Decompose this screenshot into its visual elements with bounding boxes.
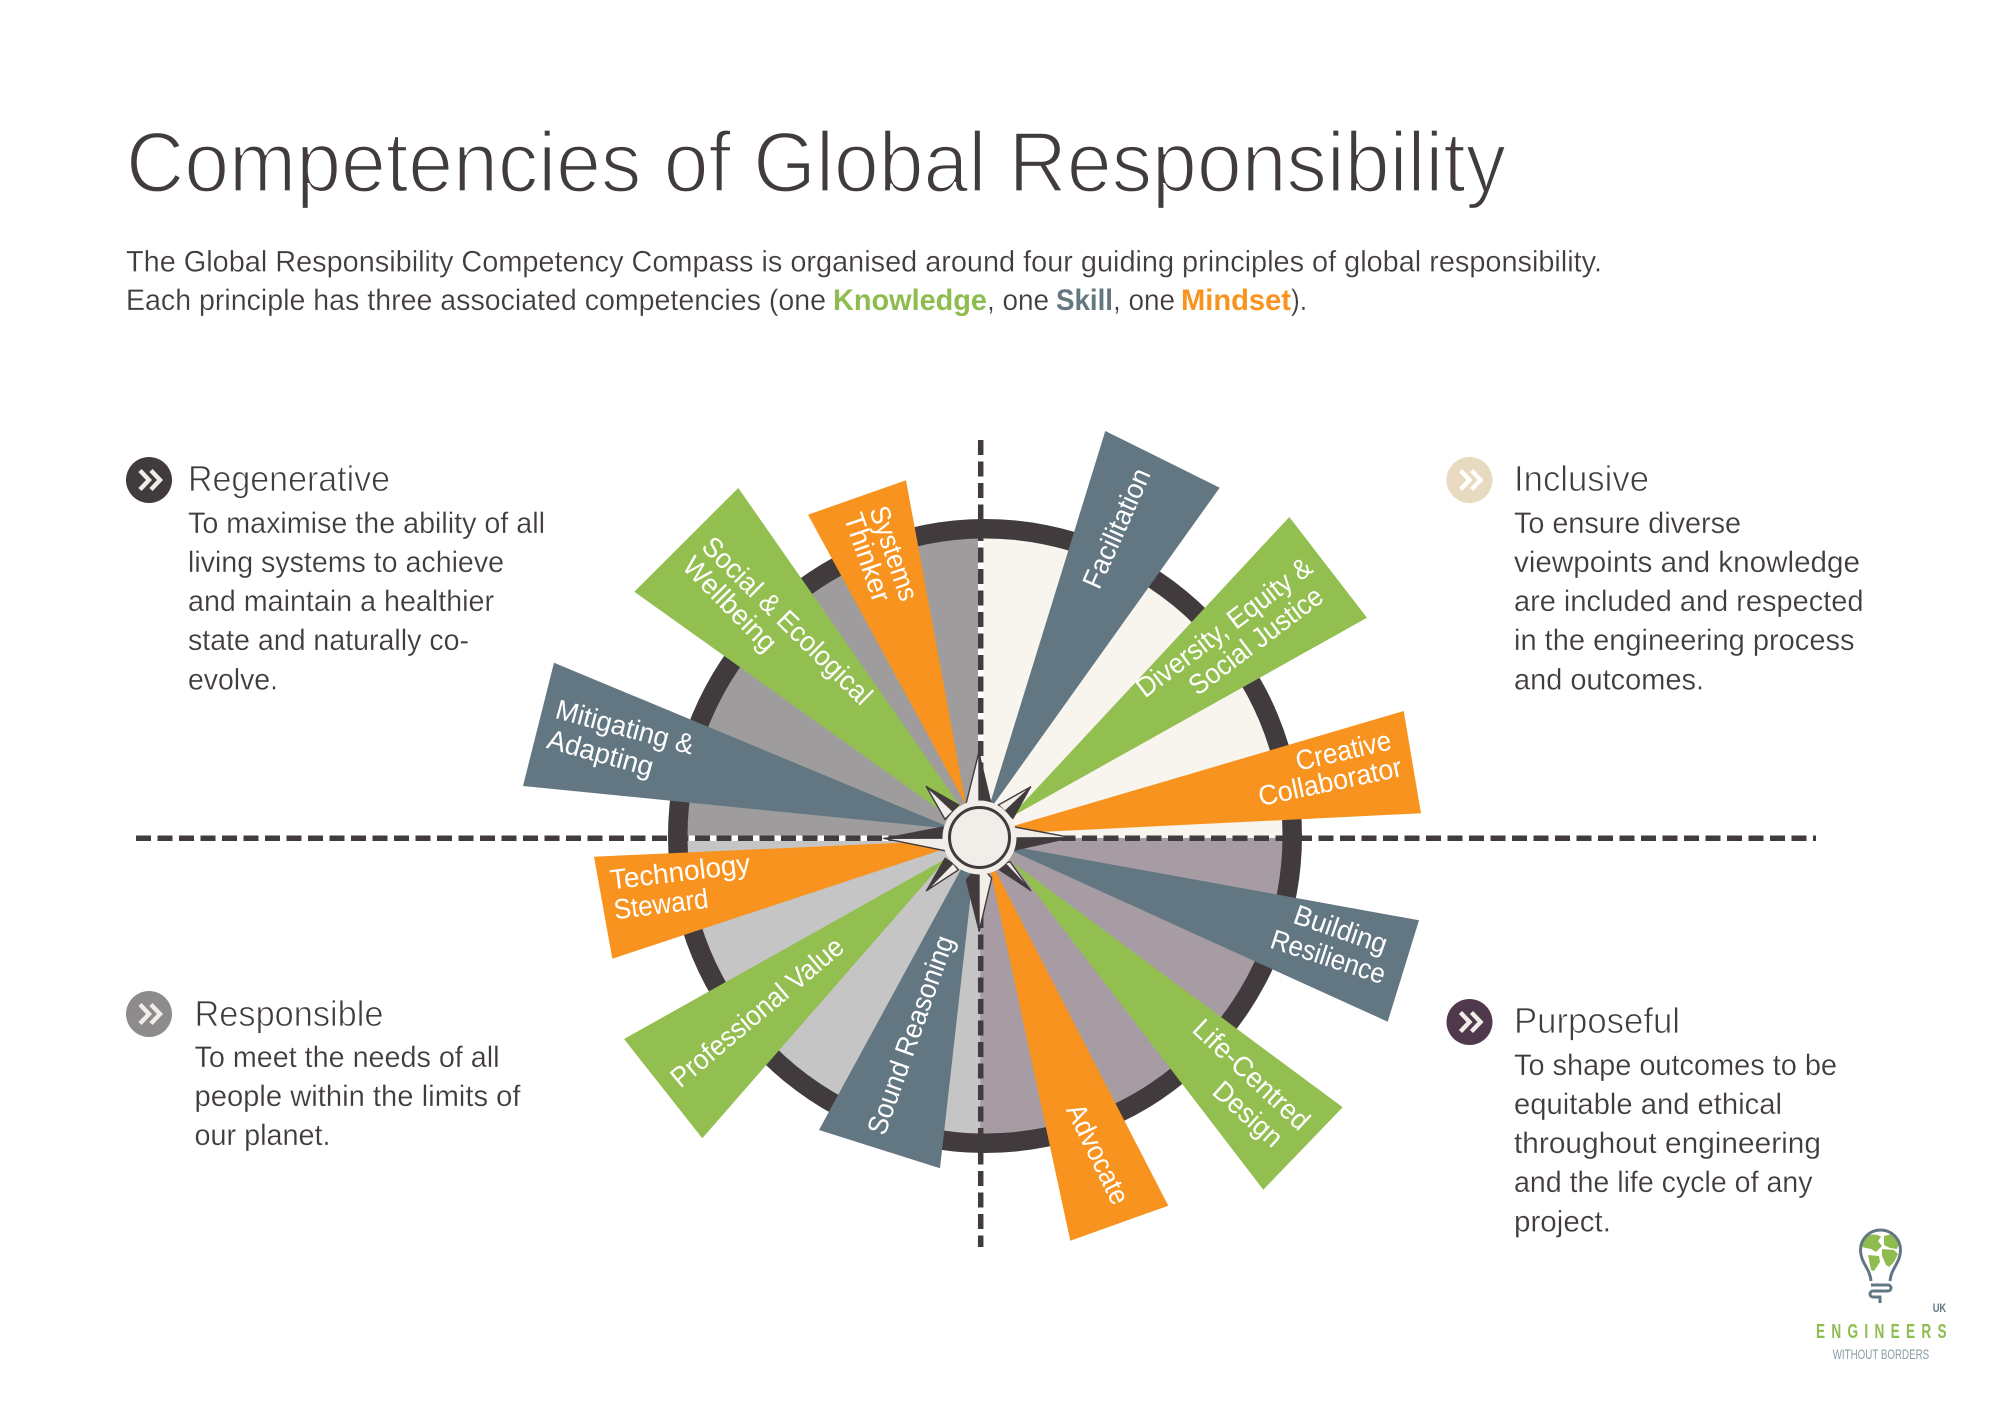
blade: Systems Thinker: [808, 480, 966, 805]
panel: Inclusive principle: [1446, 457, 1864, 696]
blade: Diversity, Equity & Social Justice: Social Justice: [1182, 580, 1329, 701]
heading: Regenerative: Regenerative: [188, 458, 390, 499]
blade: Professional Value: Professional Value: [664, 931, 850, 1093]
icon: Regenerative chevrons: [126, 457, 172, 503]
icon: Purposeful chevrons: [1446, 999, 1492, 1045]
text: Regenerative description: evolve.: [188, 664, 278, 696]
blade: Advocate: Advocate: [1060, 1099, 1136, 1209]
blade: Creative Collaborator: Creative: [1293, 725, 1394, 777]
blade: Mitigating & Adapting: Adapting: [544, 723, 657, 783]
intro text: Each principle has three associated competencies (one: [126, 284, 826, 317]
text: Purposeful description: project.: [1514, 1206, 1611, 1238]
blade: Mitigating & Adapting: Mitigating &: [552, 694, 698, 760]
blade: Building Resilience: [1010, 846, 1419, 1022]
panel: Regenerative principle: [126, 457, 545, 696]
compass axis lines: [136, 440, 1816, 1247]
logo text: UK: UK: [1933, 1301, 1946, 1315]
text: Purposeful description: [1514, 1049, 1837, 1238]
quadrant: Responsible: [688, 841, 981, 1134]
text: Regenerative description: To maximise the ability of all: [188, 507, 545, 540]
logo text: Engineers: ENGINEERS: [1816, 1320, 1947, 1343]
blade: Technology Steward: Technology: [608, 848, 752, 895]
blade: Creative Collaborator: Collaborator: [1255, 751, 1405, 812]
panel: Purposeful principle: [1446, 999, 1837, 1238]
text: Inclusive description: [1514, 507, 1864, 696]
intro text: , one: [1113, 284, 1175, 317]
text: Inclusive description: viewpoints and knowledge: [1514, 546, 1860, 579]
blade: Advocate: [990, 868, 1168, 1241]
blade: Social & Ecological Wellbeing: [634, 488, 962, 826]
text: Inclusive description: and outcomes.: [1514, 664, 1704, 696]
intro text: [126, 246, 1602, 317]
blade: Mitigating & Adapting: [523, 663, 954, 829]
text: Regenerative description: state and naturally co-: [188, 624, 469, 657]
blade: Technology Steward: Steward: [612, 883, 710, 925]
text: Regenerative description: living systems to achieve: [188, 546, 504, 579]
intro text: ).: [1291, 284, 1307, 317]
heading: Responsible: Responsible: [194, 993, 384, 1034]
heading: Purposeful: Purposeful: [1514, 1000, 1680, 1041]
panel: Responsible principle: [126, 991, 521, 1152]
icon: Inclusive chevrons: [1446, 457, 1492, 503]
text: Purposeful description: equitable and ethical: [1514, 1088, 1782, 1121]
text: Purposeful description: throughout engineering: [1514, 1127, 1821, 1160]
quadrant: Purposeful: [980, 838, 1282, 1134]
icon: compass star: [883, 752, 1072, 932]
intro text: Knowledge: [833, 284, 987, 317]
icon: light bulb with globe: [1860, 1230, 1900, 1303]
blade: Life-Centred Design: Design: [1207, 1075, 1289, 1153]
intro text: , one: [987, 284, 1049, 317]
text: Inclusive description: are included and respected: [1514, 585, 1864, 618]
text: Responsible description: our planet.: [194, 1119, 330, 1152]
text: Inclusive description: in the engineering process: [1514, 624, 1854, 657]
compass ring: [668, 519, 1302, 1153]
logo text: Without Borders: WITHOUT BORDERS: [1833, 1347, 1929, 1362]
blade: Facilitation: Facilitation: [1076, 464, 1157, 593]
blade: Systems Thinker: Systems: [863, 502, 925, 605]
blade: Sound Reasoning: Sound Reasoning: [861, 931, 960, 1139]
intro text: The Global Responsibility Competency Compass is organised around four guiding principles of global responsibility.: [126, 246, 1602, 278]
blade: Technology Steward: [594, 840, 973, 959]
blade: Diversity, Equity & Social Justice: [1009, 517, 1367, 818]
blade: Sound Reasoning: [819, 840, 977, 1168]
blade: Building Resilience: Resilience: [1267, 924, 1390, 990]
text: Regenerative description: and maintain a healthier: [188, 585, 494, 618]
logo: Engineers Without Borders UK: [1816, 1230, 1947, 1362]
blade: Diversity, Equity & Social Justice: Diversity, Equity &: [1130, 551, 1318, 703]
compass chart: [136, 431, 1816, 1247]
quadrant: Regenerative: [688, 538, 981, 836]
text: Regenerative description: [188, 507, 545, 696]
blade: Systems Thinker: Thinker: [838, 509, 897, 606]
blade: Life-Centred Design: [1012, 862, 1343, 1190]
quadrant: Inclusive: [980, 538, 1282, 838]
text: Inclusive description: To ensure diverse: [1514, 507, 1741, 540]
blade: Creative Collaborator: [984, 711, 1421, 835]
title: Competencies of Global Responsibility: [126, 116, 1506, 210]
text: Responsible description: To meet the needs of all: [194, 1041, 500, 1074]
text: Purposeful description: and the life cycle of any: [1514, 1166, 1812, 1199]
blade: Facilitation: [985, 431, 1220, 820]
blade: Life-Centred Design: Life-Centred: [1187, 1013, 1316, 1136]
intro text: Mindset: [1181, 284, 1291, 317]
heading: Inclusive: Inclusive: [1514, 458, 1649, 499]
text: Responsible description: people within the limits of: [194, 1080, 521, 1113]
blade: Social & Ecological Wellbeing: Social & Ecological: [696, 530, 879, 711]
text: Purposeful description: To shape outcomes to be: [1514, 1049, 1837, 1082]
blade: Professional Value: [624, 858, 947, 1138]
intro text: Skill: [1056, 284, 1113, 317]
icon: Responsible chevrons: [126, 991, 172, 1037]
text: Responsible description: [194, 1041, 521, 1152]
blade: Building Resilience: Building: [1290, 899, 1392, 960]
blade: Social & Ecological Wellbeing: Wellbeing: [677, 550, 783, 658]
